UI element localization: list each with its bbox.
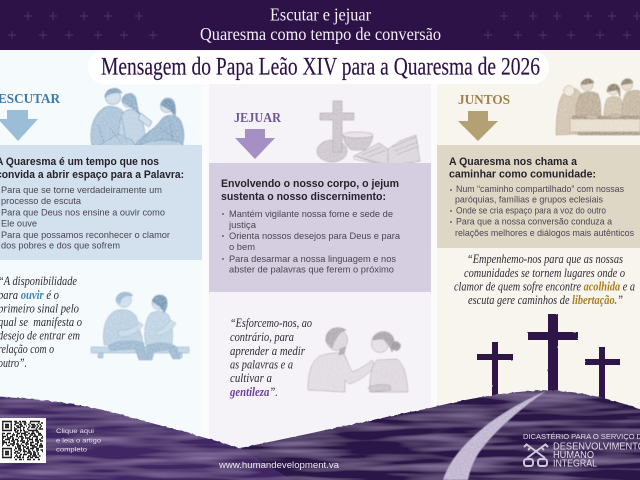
panel: jejuar text box: Para desarmar a nossa linguagem e nos [229, 254, 396, 265]
icon: crossed keys [524, 444, 548, 466]
road [443, 391, 546, 480]
header band: Escutar e jejuar [270, 4, 371, 24]
title pill [88, 51, 549, 84]
qr code [0, 418, 46, 463]
panel: juntos text box: paróquias, famílias e grupos eclesiais [455, 194, 603, 206]
panel: juntos text box [437, 145, 640, 248]
icon: three crosses [477, 314, 620, 401]
qr caption [56, 428, 101, 454]
panel: juntos text box: Onde se cria espaço para a voz do outro [456, 206, 606, 216]
panel: juntos text box: caminhar como comunidade: [449, 168, 596, 180]
panel: jejuar text box: Envolvendo o nosso corpo, o jejum [221, 178, 399, 190]
dicastery logo [523, 432, 640, 470]
quote: jejuar: “Esforcemo-nos, ao [230, 316, 312, 330]
arrow: juntos [458, 111, 498, 141]
panel: juntos column [437, 50, 640, 480]
panel: jejuar text box: Mantém vigilante nossa fome e sede de [229, 209, 393, 220]
quote: jejuar: cultivar a [230, 371, 272, 385]
panel: escutar text box: A Quaresma é um tempo que nos [0, 156, 159, 168]
quote: juntos: escuta gere caminhos de libertação.” [468, 293, 623, 307]
qr caption: e leia o artigo [56, 438, 101, 444]
heading: jejuar: JEJUAR [234, 111, 282, 126]
panel: escutar text box: processo de escuta [1, 196, 82, 207]
illustration: community at table [556, 79, 640, 135]
panel: juntos text box: Para que a nossa conversão conduza a [456, 216, 613, 228]
panel: escutar text box: Para que possamos reconhecer o clamor [1, 230, 170, 241]
illustration: man and woman talking [308, 328, 408, 392]
panel: escutar text box: dos pobres e dos que sofrem [1, 240, 120, 252]
panel: escutar text box: Para que se torne verdadeiramente um [1, 185, 162, 196]
panel: escutar text box: Ele ouve [1, 218, 37, 230]
panel: jejuar text box [209, 163, 431, 292]
panel: juntos text box: Num “caminho compartilhado” com nossas [456, 184, 624, 195]
arrow: jejuar [235, 129, 275, 159]
quote: jejuar [229, 316, 312, 399]
quote: jejuar: gentileza”. [229, 385, 278, 399]
header band: Quaresma como tempo de conversão [200, 24, 441, 44]
panel: escutar text box: convida a abrir espaço para a Palavra: [0, 169, 184, 181]
quote: juntos: clamor de quem sofre encontre acolhida e a [454, 280, 635, 294]
panel: jejuar text box: abster de palavras que ferem o próximo [229, 264, 394, 276]
quote: escutar: qual se manifesta o [0, 315, 82, 329]
quote: escutar: primeiro sinal pelo [0, 302, 79, 316]
panel: escutar column [0, 50, 202, 480]
dicastery logo: INTEGRAL [553, 458, 597, 470]
illustration: three people listening [91, 88, 185, 148]
qr caption: completo [56, 446, 87, 454]
heading: juntos: JUNTOS [458, 93, 510, 108]
quote: jejuar: as palavras e a [230, 358, 293, 372]
website url: www.humandevelopment.va [218, 460, 340, 471]
panel: jejuar text box: justiça [228, 220, 257, 231]
dicastery logo: HUMANO [553, 450, 594, 461]
panel: escutar text box [0, 145, 202, 260]
quote: escutar [0, 274, 82, 370]
panel: juntos text box: A Quaresma nos chama a [449, 156, 578, 168]
quote: jejuar: contrário, para [230, 330, 294, 344]
qr caption: Clique aqui [56, 428, 95, 435]
quote: jejuar: aprender a medir [230, 344, 305, 358]
quote: escutar: desejo de entrar em [0, 328, 80, 342]
quote: juntos [454, 252, 635, 307]
panel: escutar text box: Para que Deus nos ensine a ouvir como [1, 208, 165, 218]
illustration: cross, bowl and book [317, 101, 420, 167]
panel: jejuar text box: sustenta o nosso discernimento: [221, 191, 386, 203]
arrow: escutar [0, 110, 38, 141]
illustration: two men on a bench [91, 292, 189, 360]
panel: jejuar text box: o bem [229, 242, 255, 253]
quote: escutar: “A disponibilidade [0, 274, 77, 288]
header band [0, 0, 640, 50]
quote: escutar: relação com o [0, 342, 54, 356]
hills and road [0, 390, 640, 480]
panel: jejuar column [209, 84, 431, 480]
panel: jejuar text box: Orienta nossos desejos para Deus e para [229, 231, 401, 242]
